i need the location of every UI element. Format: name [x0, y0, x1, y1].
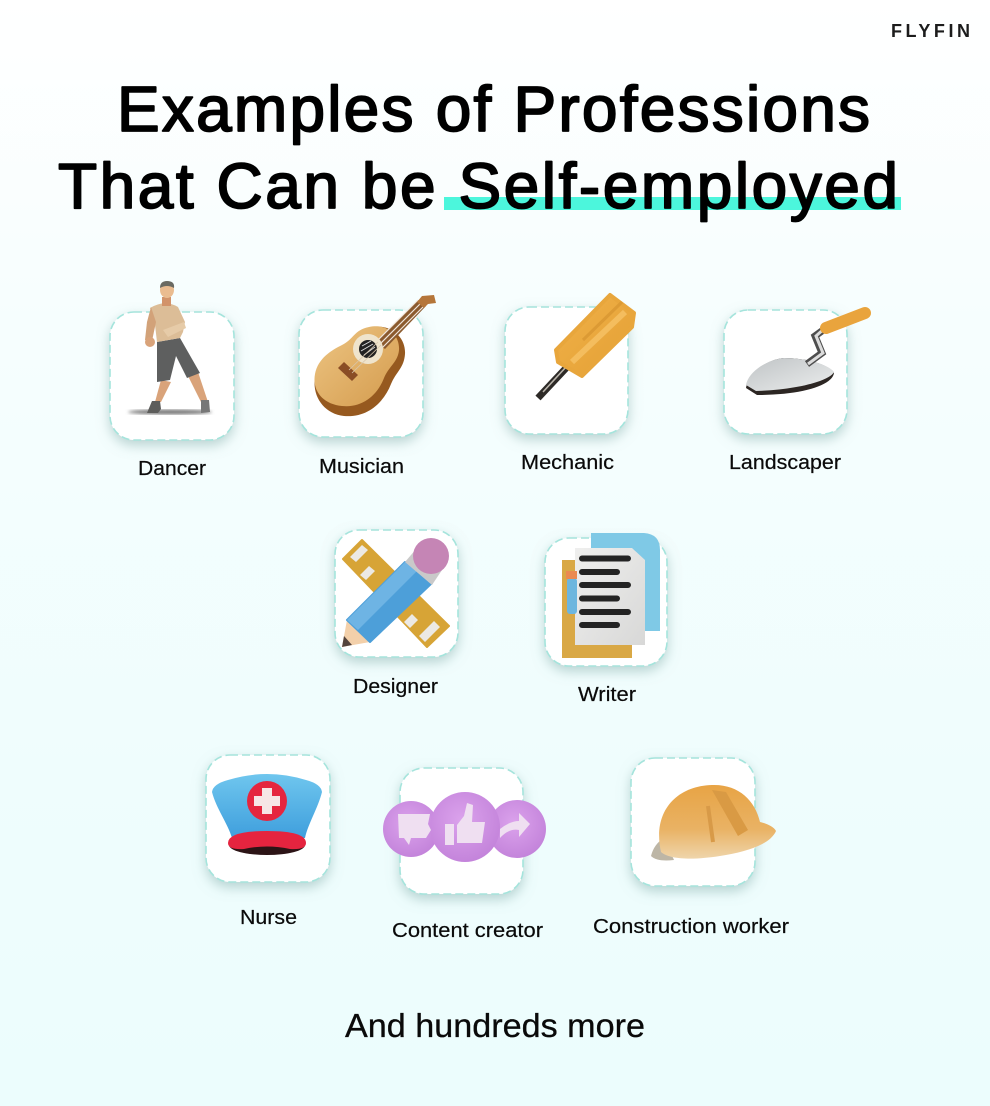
- card: Nurse: [206, 755, 330, 882]
- icon: nurse cap: [212, 774, 322, 855]
- label: Writer: Writer: [578, 684, 636, 706]
- logo: FLYFIN: FLYFIN: [891, 21, 970, 41]
- item: Nurse: [206, 755, 330, 929]
- footer text: And hundreds more: [345, 1007, 645, 1044]
- label: Musician: Musician: [319, 456, 404, 478]
- item: Content creator: [383, 768, 546, 942]
- item: Writer: [545, 533, 667, 706]
- label: Construction worker: Construction worker: [593, 916, 789, 938]
- label: Landscaper: Landscaper: [729, 452, 841, 474]
- item: Landscaper: [724, 310, 865, 474]
- icon: pencil and ruler: [342, 538, 449, 647]
- card: Dancer: [110, 312, 234, 440]
- card: Writer: [545, 538, 667, 666]
- icon: hard hat: [651, 785, 776, 860]
- icon: dancer figure: [128, 281, 212, 414]
- item: Construction worker: [593, 758, 789, 938]
- label: Content creator: Content creator: [392, 920, 543, 942]
- title: [58, 73, 901, 222]
- label: Nurse: Nurse: [240, 907, 297, 929]
- item: Dancer: [110, 281, 234, 480]
- label: Mechanic: Mechanic: [521, 452, 614, 474]
- title line 2: That Can be Self-employed: [58, 150, 898, 222]
- icon: documents and folder: [562, 533, 660, 658]
- card: Construction worker: [631, 758, 755, 886]
- title line 1: Examples of Professions: [117, 73, 870, 145]
- card: Designer: [335, 530, 458, 657]
- icon: social reactions: [383, 792, 546, 862]
- icon: screwdriver: [538, 295, 634, 398]
- item: Musician: [299, 295, 436, 478]
- item: Designer: [335, 530, 458, 698]
- item: Mechanic: [505, 295, 634, 474]
- card: Mechanic: [505, 307, 628, 434]
- card: Musician: [299, 310, 423, 437]
- icon: guitar: [314, 295, 436, 416]
- label: Dancer: Dancer: [138, 458, 206, 480]
- label: Designer: Designer: [353, 676, 438, 698]
- card: Landscaper: [724, 310, 847, 434]
- title highlight underline: [444, 197, 901, 210]
- icon: trowel: [746, 313, 865, 395]
- card: Content creator: [400, 768, 523, 894]
